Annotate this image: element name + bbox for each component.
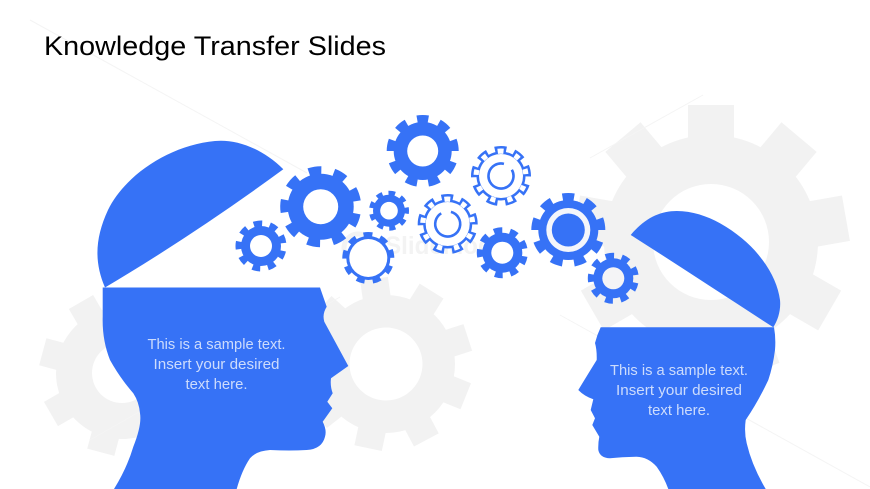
right head text: Insert your desired xyxy=(616,383,742,399)
right head text xyxy=(610,363,748,419)
left head: face silhouette xyxy=(103,288,348,489)
gear: small far right xyxy=(588,253,638,303)
background gear: left xyxy=(39,290,205,456)
background gear: middle xyxy=(300,277,472,451)
left head text: This is a sample text. xyxy=(148,337,286,353)
left head text: text here. xyxy=(186,377,248,393)
gear: large right with ring xyxy=(535,197,601,263)
gear: lower centre right xyxy=(477,227,528,278)
gear: top centre xyxy=(391,119,455,183)
right head text: This is a sample text. xyxy=(610,363,748,379)
right head: open skull cap xyxy=(631,211,780,327)
background gear: right xyxy=(572,105,850,379)
right head: face silhouette xyxy=(578,327,775,489)
left head text xyxy=(148,337,286,393)
right head text: text here. xyxy=(648,403,710,419)
watermark logo xyxy=(344,232,513,262)
gear: large left xyxy=(279,165,362,248)
left head: open skull cap xyxy=(97,141,283,288)
left head text: Insert your desired xyxy=(154,357,280,373)
gear: thin ring xyxy=(345,235,392,281)
gear: outlined upper right xyxy=(474,150,528,202)
gear: small far left xyxy=(236,221,286,271)
gear: small centre left xyxy=(369,190,409,231)
watermark logo: SlideModel xyxy=(385,232,513,260)
title: Knowledge Transfer Slides xyxy=(44,31,386,61)
gear: outlined centre xyxy=(421,198,474,250)
